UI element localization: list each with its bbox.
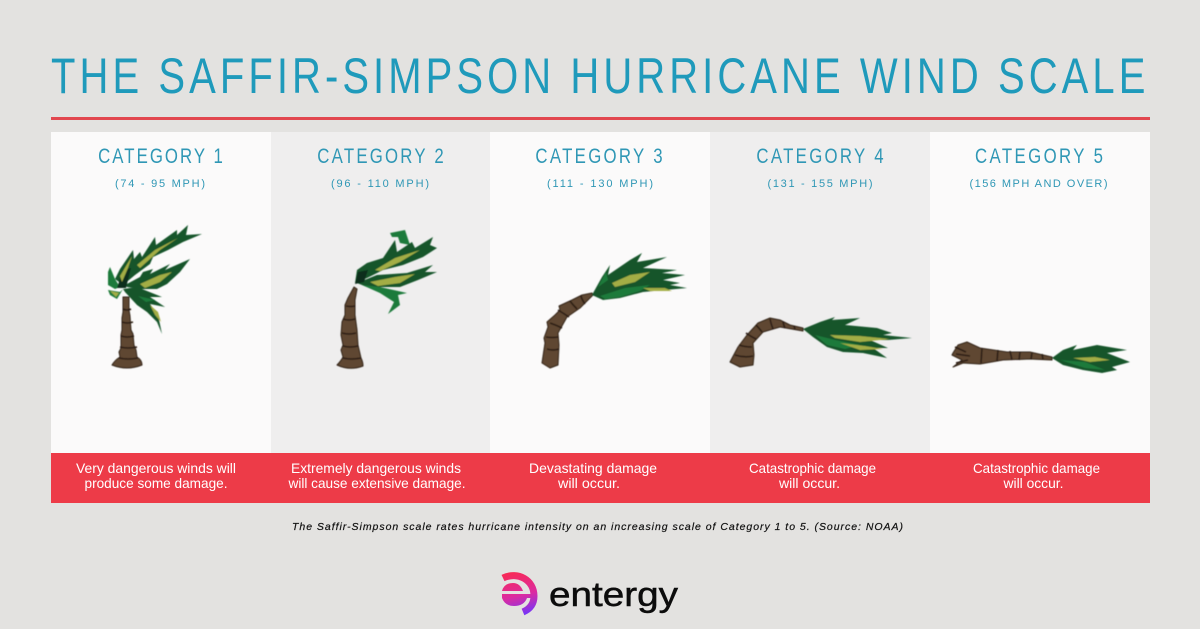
panel: category 5	[930, 132, 1150, 453]
wordmark: entergy	[549, 576, 678, 614]
description: category 1: Very dangerous winds will	[76, 460, 236, 476]
icon: palm tree category 5	[952, 342, 1130, 373]
icon: palm tree category 2	[337, 230, 437, 368]
panel: category 4	[710, 132, 930, 453]
panel: category 1	[51, 132, 271, 453]
description: category 2: will cause extensive damage.	[288, 475, 466, 491]
panel: category 3	[490, 132, 710, 453]
icon: entergy mark	[502, 576, 534, 612]
heading: category 3: CATEGORY 3	[535, 145, 663, 169]
damage band	[51, 453, 1150, 503]
heading: category 5: CATEGORY 5	[975, 145, 1103, 169]
description: category 1: produce some damage.	[84, 475, 228, 491]
description: category 3: Devastating damage	[529, 460, 657, 476]
wind speed: category 5: (156 MPH AND OVER)	[970, 178, 1108, 190]
wind speed: category 4: (131 - 155 MPH)	[768, 178, 872, 190]
icon: palm tree category 1	[108, 225, 202, 368]
icon: palm tree category 4	[730, 317, 912, 367]
wind speed: category 3: (111 - 130 MPH)	[547, 178, 653, 190]
title: THE SAFFIR-SIMPSON HURRICANE WIND SCALE	[51, 48, 1145, 104]
wind speed: category 2: (96 - 110 MPH)	[331, 178, 429, 190]
description: category 3: will occur.	[557, 475, 620, 491]
description: category 4: Catastrophic damage	[749, 460, 876, 476]
heading: category 4: CATEGORY 4	[756, 145, 884, 169]
wind speed: category 1: (74 - 95 MPH)	[115, 178, 205, 190]
logo: entergy	[502, 576, 678, 614]
panel: category 2	[271, 132, 490, 453]
heading: category 1: CATEGORY 1	[98, 145, 223, 169]
heading: category 2: CATEGORY 2	[317, 145, 444, 169]
description: category 5: will occur.	[1003, 475, 1064, 491]
description: category 5: Catastrophic damage	[973, 460, 1100, 476]
description: category 2: Extremely dangerous winds	[291, 460, 461, 476]
icon: palm tree category 3	[542, 253, 687, 368]
source note: The Saffir-Simpson scale rates hurricane intensity on an increasing scale of Category 1 to 5. (Source: NOAA)	[292, 521, 903, 533]
description: category 4: will occur.	[778, 475, 840, 491]
